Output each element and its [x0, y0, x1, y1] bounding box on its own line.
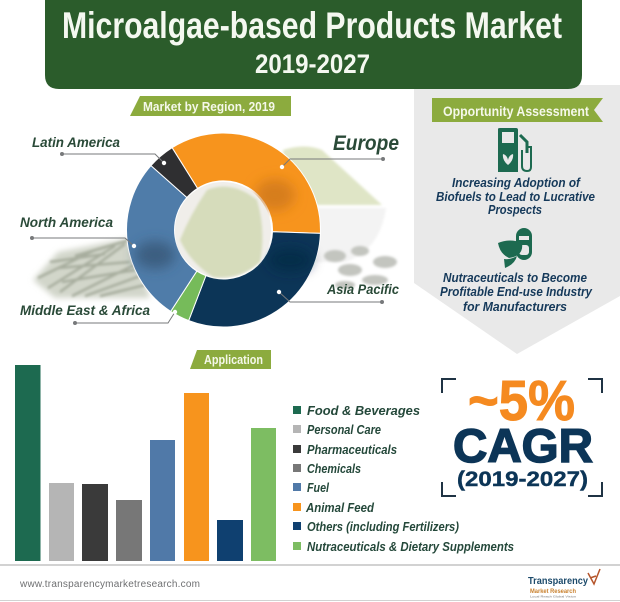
- panel: opportunity assessment background: [414, 85, 620, 354]
- region label: North America: [20, 215, 136, 248]
- legend: applications: Food & Beverages: [307, 404, 420, 418]
- donut centre: powder photo: [175, 182, 271, 278]
- segment: Asia Pacific: [189, 232, 320, 327]
- legend: applications: [293, 404, 514, 554]
- text: biofuels opportunity: Prospects: [488, 203, 542, 217]
- text: nutraceuticals opportunity: [440, 271, 593, 314]
- legend: applications: Nutraceuticals & Dietary Supplements: [307, 540, 514, 554]
- text: nutraceuticals opportunity: Nutraceuticals to Become: [443, 271, 587, 285]
- footer rule: [0, 564, 620, 566]
- text: nutraceuticals opportunity: for Manufacturers: [463, 300, 567, 314]
- heading: application: [190, 350, 271, 369]
- legend: applications: Others (including Fertilizers): [307, 520, 459, 534]
- region label: North America: North America: [20, 215, 113, 230]
- callout: CAGR: ~5%: [468, 369, 575, 433]
- region label: Middle East & Africa: Middle East & Africa: [20, 303, 150, 318]
- photo tint over donut: [135, 179, 312, 272]
- icon: biofuel pump: [498, 128, 531, 172]
- footer website: www.transparencymarketresearch.com: [19, 579, 200, 590]
- region label: Latin America: Latin America: [32, 135, 120, 150]
- background photo: powder pile and bowl: [283, 146, 386, 262]
- text: biofuels opportunity: Biofuels to Lead to Lucrative: [436, 190, 595, 204]
- logo: Transparency Market Research: Market Research: [530, 588, 576, 595]
- logo: Transparency Market Research: Transparency: [528, 575, 588, 587]
- logo: Transparency Market Research: Local Reach Global Vision: [530, 594, 576, 598]
- text: biofuels opportunity: Increasing Adoption of: [452, 176, 582, 190]
- text: nutraceuticals opportunity: Profitable End-use Industry: [440, 285, 593, 299]
- footer bottom rule: [0, 600, 620, 601]
- legend: applications: Animal Feed: [305, 501, 374, 515]
- background photo: algae tablets: [324, 246, 397, 289]
- legend: applications: Fuel: [307, 481, 329, 495]
- legend: applications: Personal Care: [307, 423, 381, 437]
- region label: Europe: Europe: [333, 132, 399, 155]
- segment: Middle East & Africa: [171, 271, 206, 321]
- region label: Europe: [280, 132, 399, 169]
- title banner: 2019-2027: [255, 49, 370, 79]
- segment: Europe: [172, 133, 320, 233]
- text: biofuels opportunity: [436, 176, 595, 217]
- callout: CAGR: [442, 369, 602, 496]
- callout: CAGR: CAGR: [453, 419, 593, 472]
- segment: Latin America: [151, 148, 198, 198]
- region label: Asia Pacific: [277, 282, 399, 304]
- background photo: algae grass: [33, 238, 150, 298]
- region label: Middle East & Africa: [20, 303, 177, 325]
- legend: applications: Chemicals: [307, 462, 361, 476]
- legend: applications: Pharmaceuticals: [307, 443, 397, 457]
- donut chart: market by region: [127, 133, 320, 327]
- heading: market by region: [130, 96, 291, 116]
- heading: opportunity assessment: Opportunity Assessment: [443, 103, 589, 119]
- segment: North America: [127, 166, 197, 311]
- region label: Latin America: [32, 135, 166, 165]
- region label: Asia Pacific: Asia Pacific: [326, 282, 399, 297]
- bar chart: application: [15, 365, 276, 561]
- icon: capsule and leaf: [498, 228, 532, 268]
- callout: CAGR: (2019-2027): [457, 468, 588, 491]
- title banner: [45, 0, 582, 89]
- heading: market by region: Market by Region, 2019: [143, 100, 275, 114]
- heading: application: Application: [204, 353, 263, 367]
- heading: opportunity assessment: [432, 98, 603, 122]
- logo: Transparency Market Research: [528, 569, 600, 598]
